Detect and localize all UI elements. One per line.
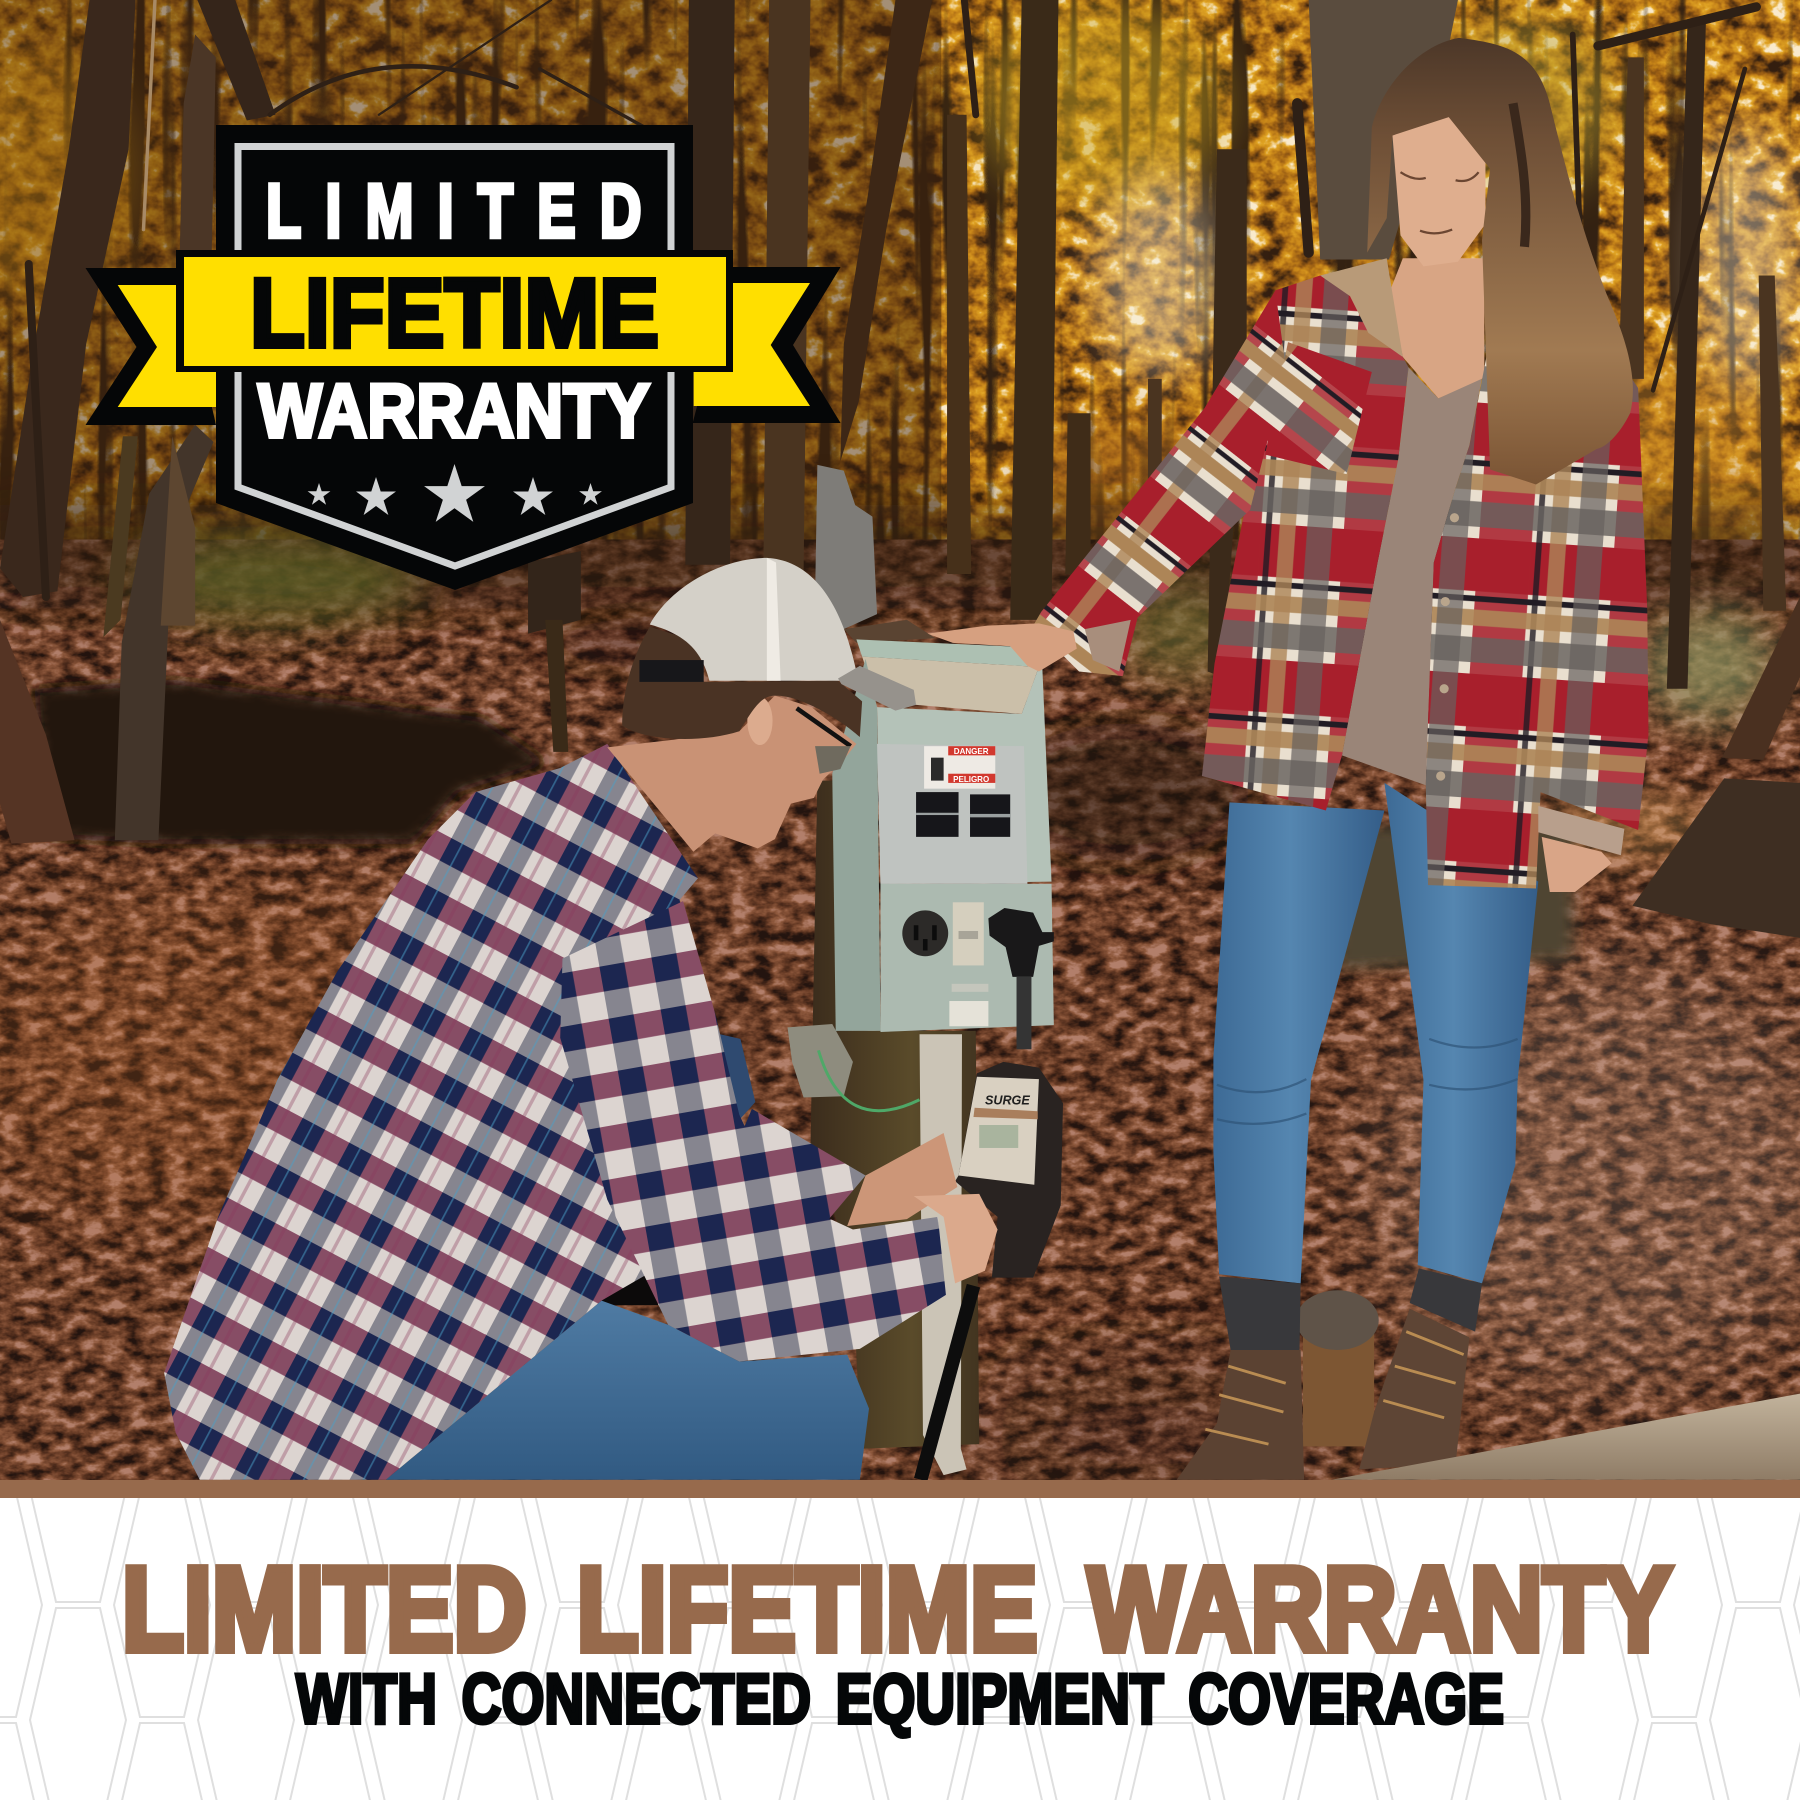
far forearm sleeve [739,1109,866,1226]
face [1392,115,1485,266]
black shield [216,125,693,590]
round receptacle [902,910,948,956]
undershirt cuff [1538,806,1624,855]
neck and face [607,696,856,852]
five stars [308,464,602,522]
GFCI outlet [953,902,984,965]
upper panel [877,667,1052,884]
circuit breakers [916,792,1010,837]
forest floor: fallen leaves [0,505,1800,1504]
white conduit [920,1034,967,1475]
ribbon left tail [86,268,227,425]
dark earthen bank [34,680,549,844]
right hand [1542,837,1612,892]
danger label: DANGER [954,747,989,756]
long hair [1367,38,1633,484]
hair [622,627,862,739]
shirt sleeve near arm [560,901,946,1361]
lower panel [880,884,1054,1032]
cap strap [639,660,704,682]
LIMITED text: LIMITED [266,169,641,254]
surge protector device [955,1062,1063,1278]
socks [1219,1268,1482,1350]
jacket right panel and sleeve [1426,321,1648,889]
cap white mesh band [767,558,781,681]
background: autumn forest canopy [0,0,1800,712]
man kneeling [164,558,998,1480]
left leg jeans [1213,802,1384,1283]
plug cord [1017,977,1030,1049]
WARRANTY text: WARRANTY [258,369,650,454]
wooden post [810,781,979,1449]
surge protector device: SURGE [985,1093,1030,1107]
jeans [386,1301,869,1480]
danger label [924,746,995,789]
dark hair strand [1513,103,1526,247]
neck and chest [1388,258,1484,398]
green ground wire [818,1050,920,1111]
ear [747,697,773,745]
tree trunks [0,0,1800,844]
brown divider band [0,1480,1800,1498]
galvanized inner face [877,744,1027,884]
post: weathered stump behind pedestal [815,465,877,629]
open lid underside [862,657,1039,714]
jacket sleeve raised arm [1033,290,1286,676]
inner cuff [1085,620,1131,672]
right leg jeans [1384,783,1538,1283]
lid top [856,639,1048,667]
background right: root mound and stump [1337,778,1800,970]
cap crown [650,558,856,681]
power pedestal assembly [788,639,1063,1480]
center ribbon band [176,250,733,372]
dark gap under arm [597,1246,660,1305]
jacket buttons [1436,513,1459,781]
glasses [797,708,851,774]
LIFETIME text: LIFETIME [250,258,659,368]
wrist and far hand [847,1133,957,1226]
jeans wrinkles [1217,1039,1518,1124]
facial features [1401,172,1479,233]
danger label: PELIGRO [953,775,989,784]
near hand [914,1194,998,1283]
taupe tee [1342,367,1482,785]
boots [1177,1309,1469,1480]
rock at top of post [844,620,936,643]
foreground log [1332,1394,1800,1480]
ribbon right tail [693,267,841,423]
hand on lid [928,623,1077,672]
grey junction box [788,1024,853,1097]
jacket left panel [1202,262,1409,810]
jacket pocket [1265,342,1372,474]
connected plug [988,908,1054,977]
panel stickers [949,984,988,1026]
jacket collar [1320,258,1403,357]
surge output cord [921,1286,973,1480]
far knee jeans [551,1033,755,1283]
shirt torso [164,744,746,1480]
bottom panel [0,1480,1800,1800]
woman standing [928,38,1648,1480]
silver shield outline [238,146,671,566]
cap brim [838,666,916,711]
panel left side [832,659,880,1031]
stump valve cover [1296,1290,1379,1446]
subheading: WITH CONNECTED EQUIPMENT COVERAGE [296,1659,1504,1738]
warranty badge [86,125,841,590]
